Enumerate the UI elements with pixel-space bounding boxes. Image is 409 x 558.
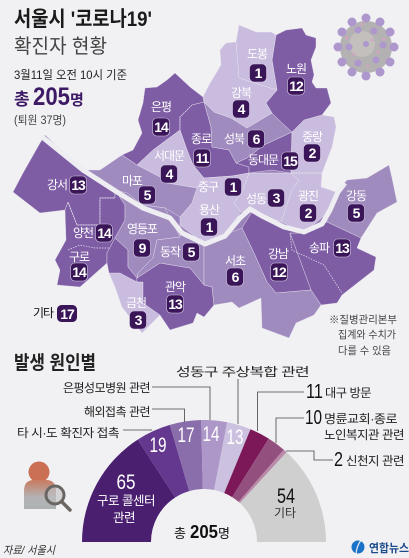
label: 금천 3: 3 <box>135 312 143 328</box>
chart values: 관련 <box>113 511 135 525</box>
district: Gwanak <box>137 263 214 330</box>
river: Han <box>41 136 345 244</box>
callout: 타 시·도: 타 시·도 확진자 접촉 <box>17 426 119 440</box>
title: 서울시 '코로나19' <box>14 8 152 31</box>
district: Dobong <box>236 25 277 90</box>
district: Eunpyeong <box>122 73 204 165</box>
chart values: 13 <box>226 426 244 449</box>
label: 은평 14: 은평 <box>151 100 171 114</box>
district: Gangbuk <box>203 42 277 128</box>
label: 중랑 2: 2 <box>309 145 317 161</box>
label: 강북 4: 4 <box>238 101 246 117</box>
label: 영등포 9 <box>127 222 158 257</box>
district: Songpa <box>290 222 376 305</box>
label: 양천 14 <box>73 224 112 242</box>
label: 관악 13: 관악 <box>165 280 186 294</box>
label: 은평 14: 14 <box>154 119 169 135</box>
chart values: 65 <box>116 471 136 494</box>
label: 강서 13: 강서 <box>47 178 67 192</box>
callout: 대구 방문 <box>258 381 371 431</box>
label: 구로 14 <box>69 250 90 281</box>
logo: Yonhap News <box>352 539 409 556</box>
label: 서대문 4 <box>154 149 185 183</box>
district: Yangcheon and Guro <box>55 190 125 287</box>
callout: 해외접촉 <box>84 405 184 422</box>
label: 용산 1 <box>199 203 220 236</box>
label: 동작 5: 동작 <box>160 245 181 259</box>
callout: 신천지 <box>286 449 404 471</box>
label: 송파 13: 송파 <box>309 241 330 255</box>
label: 광진 2 <box>298 189 318 222</box>
label: 중구 1 <box>198 178 242 196</box>
label: 종로 11: 종로 <box>191 132 212 146</box>
label: 도봉 1: 도봉 <box>247 47 268 61</box>
label: 용산 1: 용산 <box>199 203 220 217</box>
segment 65 <box>82 440 175 542</box>
label: 영등포 9: 영등포 <box>127 222 158 236</box>
subtitle: 확진자 현황 <box>14 35 107 58</box>
label: 강북 4 <box>231 86 252 118</box>
label: 종로 11: 11 <box>196 150 210 166</box>
label: 성동 3: 3 <box>273 190 281 206</box>
district: Jungnang <box>291 115 336 173</box>
district: Yongsan and Jung <box>180 173 249 243</box>
callout: 명륜교회 <box>276 407 404 443</box>
label: 관악 13 <box>165 280 186 313</box>
chart values: 기타 <box>274 506 296 520</box>
label: 강동 5 <box>346 189 367 222</box>
district: Gangdong <box>327 165 397 238</box>
chart total <box>174 522 230 542</box>
label: 강북 4: 강북 <box>231 86 252 100</box>
label: 용산 1: 1 <box>206 219 214 235</box>
district: Seocho <box>204 228 321 338</box>
district: Nowon <box>266 28 331 132</box>
district: Seodaemun <box>137 130 204 188</box>
label: 노원 12: 노원 <box>286 62 306 76</box>
callout: 성동구 주상복합 <box>176 365 309 424</box>
district: Seongbuk <box>204 102 292 163</box>
total count <box>14 83 84 111</box>
label: 금천 3: 금천 <box>126 295 146 310</box>
label: 강동 5: 5 <box>353 205 361 221</box>
label: 은평 14 <box>151 100 171 136</box>
label: 강남 12: 강남 <box>268 247 289 261</box>
district: Yeongdeungpo <box>115 190 180 278</box>
label: 도봉 1 <box>247 47 268 82</box>
label: 종로 11 <box>191 132 212 167</box>
footnote: 다를 수 있음 <box>338 345 391 357</box>
label: 광진 2: 광진 <box>298 189 318 203</box>
footnote: 집계와 수치가 <box>338 329 396 341</box>
label: 강남 12: 12 <box>272 264 287 280</box>
district: Geumcheon <box>109 273 160 333</box>
label: 강서 13: 13 <box>71 177 86 193</box>
segment 10 <box>232 439 284 502</box>
label: 기타 17: 기타 <box>33 306 54 320</box>
chart total: 총 <box>174 526 186 541</box>
label: 서초 6 <box>225 254 246 286</box>
label: 성동 3 <box>246 189 284 207</box>
footnote <box>329 314 397 357</box>
label: 강남 12 <box>268 247 289 281</box>
chart values: 구로 콜센터 <box>97 494 155 508</box>
callout: 명륜교회: 10 <box>305 407 322 429</box>
callout: 명륜교회: 노인복지관 관련 <box>324 428 404 442</box>
segment 2 <box>239 450 287 503</box>
label: 강서 13 <box>47 176 86 194</box>
label: 양천 14: 양천 <box>73 225 93 240</box>
callout: 은평성모병원: 은평성모병원 관련 <box>63 381 150 395</box>
callout: 해외접촉: 해외접촉 관련 <box>84 405 150 419</box>
footnote: ※질병관리본부 <box>329 314 397 326</box>
label: 관악 13: 13 <box>168 296 183 312</box>
label: 기타 17 <box>33 305 77 322</box>
half donut chart <box>82 420 326 542</box>
label: 기타 17: 17 <box>60 306 75 322</box>
district: Gangnam <box>242 212 311 293</box>
chart values: 14 <box>202 423 220 446</box>
callout: 명륜교회: 명륜교회·종로 <box>324 412 397 426</box>
label: 중구 1: 1 <box>230 179 238 195</box>
heading: causes: 발생 원인별 <box>14 352 96 374</box>
label: 서대문 4: 서대문 <box>154 149 185 163</box>
segment 19 <box>138 425 189 498</box>
segment 17 <box>170 420 203 491</box>
label: 마포 5: 마포 <box>122 174 143 188</box>
district: Gwangjin <box>281 173 336 233</box>
chart values: 54 <box>277 485 295 508</box>
callout: 은평성모병원 <box>63 381 210 420</box>
label: 송파 13: 13 <box>335 240 350 256</box>
segment 11 <box>224 429 269 497</box>
chart total: 205 <box>190 522 218 542</box>
label: 성북 6: 성북 <box>224 132 245 146</box>
label: 서초 6: 서초 <box>225 254 246 268</box>
label: 동작 5 <box>160 243 200 261</box>
icon: coronavirus <box>334 14 398 80</box>
total count: 205 <box>33 83 70 111</box>
total count: 총 <box>14 90 30 109</box>
label: 서초 6: 6 <box>232 269 240 285</box>
label: 마포 5: 5 <box>144 187 152 203</box>
callout: 대구 방문: 11 <box>306 381 323 403</box>
district: lower Guro <box>107 238 137 282</box>
district: Gangseo <box>13 135 115 225</box>
label: 중랑 2: 중랑 <box>302 130 323 144</box>
callout: 신천지: 2 <box>334 449 343 471</box>
label: 도봉 1: 1 <box>255 65 263 81</box>
label: 중구 1: 중구 <box>198 180 219 194</box>
label: 마포 5 <box>122 174 156 204</box>
label: 광진 2: 2 <box>305 205 313 221</box>
label: 송파 13 <box>309 239 350 257</box>
chart values: 17 <box>178 424 194 447</box>
segment 14 <box>201 420 227 490</box>
district: Seongdong <box>234 173 299 222</box>
label: 구로 14: 구로 <box>69 250 90 264</box>
label: 동대문 15: 15 <box>283 153 298 169</box>
label: 동대문 15 <box>248 152 298 170</box>
chart values: 19 <box>150 434 166 457</box>
label: 노원 12 <box>286 62 306 95</box>
callout: 대구 방문: 대구 방문 <box>325 386 371 400</box>
label: 금천 3 <box>126 295 146 329</box>
discharged count: (퇴원 37명) <box>14 113 66 127</box>
label: 구로 14: 14 <box>72 264 87 280</box>
chart total: 명 <box>218 526 230 541</box>
source: 자료/ 서울시 <box>3 544 56 557</box>
label: 성북 6: 6 <box>253 131 261 147</box>
icon: person with magnifier <box>24 462 70 510</box>
map silhouette <box>13 25 397 338</box>
label: 성북 6 <box>224 130 264 148</box>
segment 13 <box>214 422 250 493</box>
label: 서대문 4: 4 <box>166 166 174 182</box>
label: 양천 14: 14 <box>97 225 112 241</box>
label: 성동 3: 성동 <box>246 192 267 206</box>
date note: 3월11일 오전 10시 기준 <box>14 68 127 82</box>
total count: 명 <box>70 92 84 109</box>
callout: 성동구 주상복합: 성동구 주상복합 관련 <box>176 365 309 379</box>
label: 강동 5: 강동 <box>346 189 367 203</box>
map of Seoul districts <box>13 25 397 338</box>
label: 중랑 2 <box>302 130 323 162</box>
segment 54 <box>240 452 326 542</box>
district: Mapo <box>83 155 197 217</box>
label: 동작 5: 5 <box>188 244 196 260</box>
callout: 신천지: 신천지 관련 <box>346 453 404 468</box>
chart values <box>97 423 296 525</box>
label: 영등포 9: 9 <box>139 240 147 256</box>
district: Jongno <box>180 102 249 178</box>
district: Dongjak <box>137 225 204 285</box>
label: 노원 12: 12 <box>289 78 304 94</box>
district: Dongdaemun <box>236 132 292 173</box>
label: 동대문 15: 동대문 <box>248 153 279 167</box>
